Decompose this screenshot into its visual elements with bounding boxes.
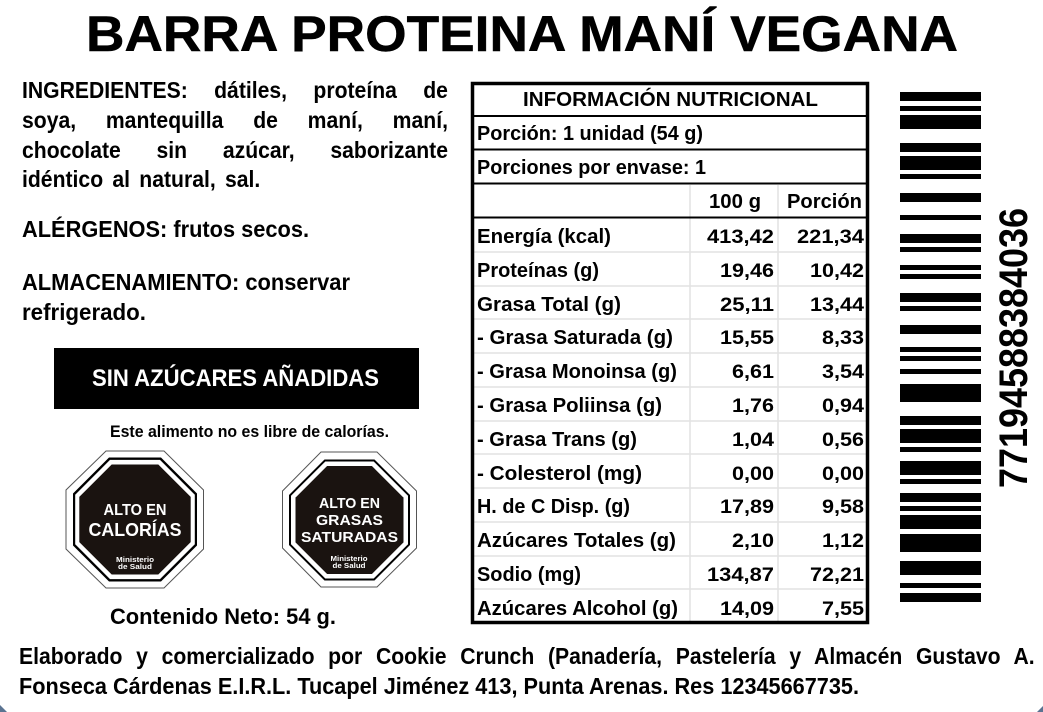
icon: alto en grasas saturadas seal: Ministerio [330, 554, 368, 563]
text block: ingredients [22, 77, 448, 192]
row: colesterol: 0,00 [822, 463, 864, 485]
corner: bottom left [0, 705, 7, 712]
row: grasa poliinsaturada: - Grasa Poliinsa (g) [477, 394, 662, 417]
serving size: Porción: 1 unidad (54 g) [477, 122, 703, 145]
text block: ingredients: INGREDIENTES: dátiles, proteína de [22, 77, 448, 103]
row: sodio: 134,87 [707, 564, 774, 586]
row: colesterol: 0,00 [732, 463, 774, 485]
barcode number: 77194588384036 [992, 208, 1036, 488]
row: grasa monoinsaturada: 3,54 [822, 361, 864, 383]
row: grasa poliinsaturada: 1,76 [732, 395, 774, 417]
row: grasa saturada [477, 326, 864, 349]
row: hidratos de carbono: H. de C Disp. (g) [477, 495, 630, 518]
row: proteínas: 10,42 [810, 260, 864, 282]
servings per package: Porciones por envase: 1 [477, 156, 706, 179]
footer line 1: Elaborado y comercializado por Cookie Crunch (Panadería, Pastelería y Almacén Gustavo A. [19, 643, 1035, 669]
row: grasa saturada: 15,55 [720, 327, 774, 349]
row: azúcares totales: 1,12 [822, 530, 864, 552]
column headers: Porción [787, 190, 862, 213]
icon: alto en calorías seal: de Salud [118, 562, 152, 571]
icon: alto en grasas saturadas seal: GRASAS [316, 512, 383, 529]
text block: storage: refrigerado. [22, 299, 146, 325]
row: grasa trans: 0,56 [822, 429, 864, 451]
row: sodio: Sodio (mg) [477, 563, 581, 586]
icon: alto en grasas saturadas seal [282, 452, 416, 587]
row: colesterol: - Colesterol (mg) [477, 462, 642, 485]
row: energía: 221,34 [797, 226, 864, 248]
text block: storage: ALMACENAMIENTO: conservar [22, 269, 350, 295]
row: energía: Energía (kcal) [477, 225, 611, 248]
row: energía [477, 225, 864, 248]
row: azúcares totales: Azúcares Totales (g) [477, 529, 676, 552]
row: energía: 413,42 [707, 226, 774, 248]
barcode [900, 92, 981, 602]
net content: Contenido Neto: 54 g. [110, 604, 336, 629]
note: calories: Este alimento no es libre de calorías. [110, 422, 389, 441]
text block: ingredients: soya, mantequilla de maní, maní, [22, 107, 448, 133]
row: grasa poliinsaturada: 0,94 [822, 395, 864, 417]
row: proteínas: Proteínas (g) [477, 259, 599, 282]
icon: alto en grasas saturadas seal: SATURADAS [301, 529, 398, 546]
row: grasa poliinsaturada [477, 394, 864, 417]
row: grasa trans: - Grasa Trans (g) [477, 428, 637, 451]
row: azúcares alcohol: Azúcares Alcohol (g) [477, 597, 678, 620]
icon: alto en calorías seal: ALTO EN [104, 502, 166, 519]
table heading: INFORMACIÓN NUTRICIONAL [523, 87, 818, 111]
corner: bottom right [1037, 706, 1043, 712]
row: azúcares alcohol: 7,55 [822, 598, 864, 620]
text block: storage [22, 269, 350, 325]
row: azúcares alcohol [477, 597, 864, 620]
row: proteínas [477, 259, 864, 282]
row: grasa monoinsaturada [477, 360, 864, 383]
title: BARRA PROTEINA MANÍ VEGANA [86, 6, 958, 62]
row: grasa saturada: 8,33 [822, 327, 864, 349]
row: grasa monoinsaturada: 6,61 [732, 361, 774, 383]
icon: alto en calorías seal [66, 451, 204, 588]
row: hidratos de carbono: 9,58 [822, 496, 864, 518]
panel: nutrition table [472, 84, 868, 622]
row: grasa trans [477, 428, 864, 451]
row: grasa saturada: - Grasa Saturada (g) [477, 326, 673, 349]
banner: sin azúcares añadidas: SIN AZÚCARES AÑADIDAS [92, 364, 379, 392]
column headers: 100 g [709, 190, 761, 213]
icon: alto en calorías seal: CALORÍAS [88, 519, 182, 540]
row: proteínas: 19,46 [720, 260, 774, 282]
column headers [709, 190, 862, 213]
row: colesterol [477, 462, 864, 485]
row: grasa total [477, 293, 864, 316]
text block: allergens: ALÉRGENOS: frutos secos. [22, 215, 309, 242]
row: azúcares totales: 2,10 [732, 530, 774, 552]
row: grasa total: 13,44 [810, 294, 864, 316]
banner: sin azúcares añadidas [54, 348, 419, 409]
icon: alto en calorías seal: Ministerio [116, 555, 154, 564]
row: hidratos de carbono: 17,89 [720, 496, 774, 518]
row: grasa total: Grasa Total (g) [477, 293, 621, 316]
row: hidratos de carbono [477, 495, 864, 518]
row: azúcares alcohol: 14,09 [720, 598, 774, 620]
table grid [472, 84, 868, 622]
row: sodio: 72,21 [810, 564, 864, 586]
icon: alto en grasas saturadas seal: ALTO EN [319, 495, 380, 512]
row: sodio [477, 563, 864, 586]
row: azúcares totales [477, 529, 864, 552]
row: grasa monoinsaturada: - Grasa Monoinsa (g) [477, 360, 677, 383]
row: grasa total: 25,11 [720, 294, 774, 316]
text block: ingredients: chocolate sin azúcar, saborizante [22, 137, 448, 163]
footer line 2: Fonseca Cárdenas E.I.R.L. Tucapel Jiménez 413, Punta Arenas. Res 12345667735. [19, 673, 859, 699]
row: grasa trans: 1,04 [732, 429, 774, 451]
text block: ingredients: idéntico al natural, sal. [22, 166, 260, 192]
icon: alto en grasas saturadas seal: de Salud [332, 561, 366, 570]
